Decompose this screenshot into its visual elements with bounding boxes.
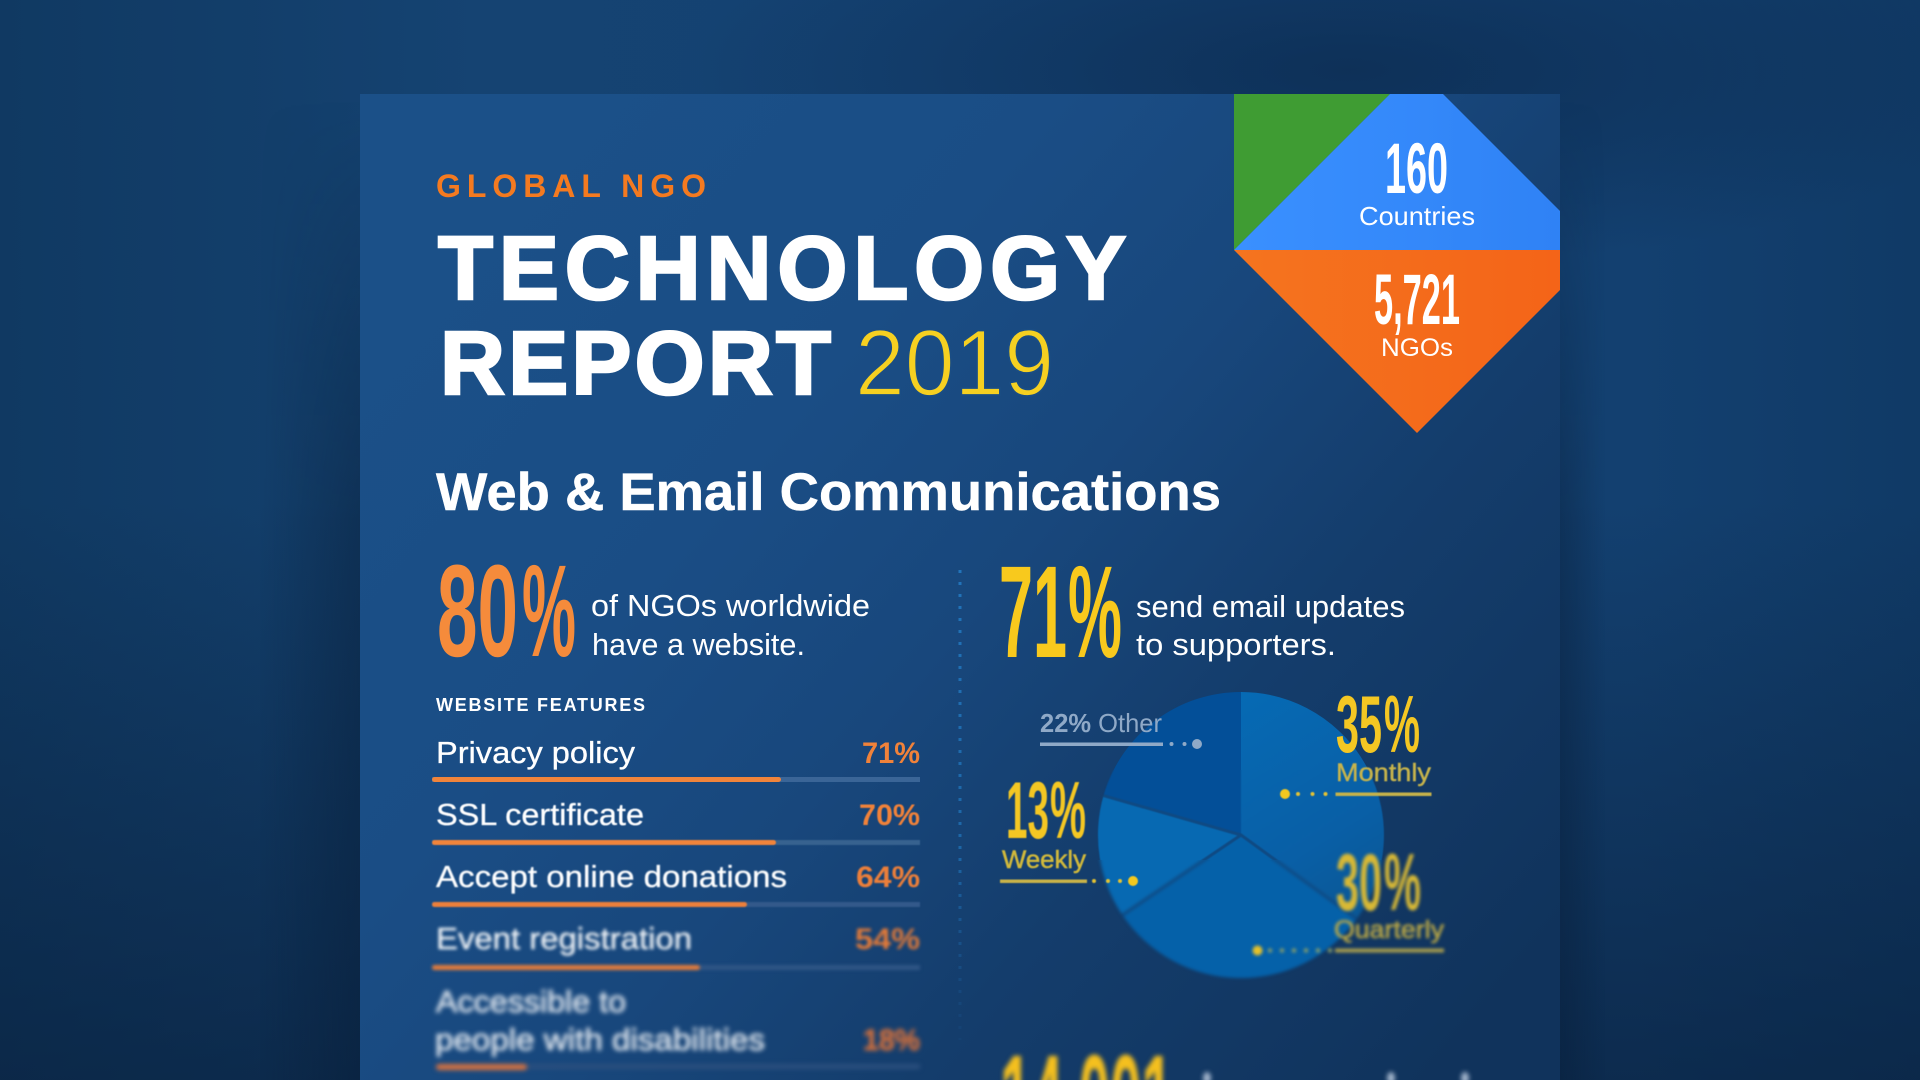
label: monthly 35%: Monthly	[1336, 759, 1432, 787]
stat: 71% email updates	[999, 538, 1405, 685]
row: accept online donations	[432, 859, 920, 907]
label: weekly 13%: Weekly	[1002, 846, 1087, 874]
stat: 5,721 NGOs	[1374, 261, 1460, 362]
row: accessible to people with disabilities	[435, 984, 920, 1070]
badge orange section	[1234, 250, 1560, 433]
title	[438, 219, 1126, 415]
stat: 80% websites	[437, 537, 870, 684]
label: quarterly 30%: 30	[1336, 838, 1382, 928]
label: monthly 35%: 35	[1336, 680, 1382, 770]
header badge: diamond	[1234, 94, 1560, 433]
row: event registration: Event registration	[436, 921, 692, 956]
stat: 71% email updates: %	[1068, 538, 1122, 685]
row: accessible to people with disabilities: people with disabilities	[435, 1022, 765, 1057]
panel: report page	[360, 94, 1560, 1080]
label: weekly 13%: 13	[1006, 766, 1049, 856]
stat: 80% websites: 80	[437, 537, 518, 684]
badge blue section	[1234, 94, 1560, 250]
label: quarterly 30%: Quarterly	[1334, 916, 1445, 944]
stat: 80% websites: %	[522, 537, 576, 684]
eyebrow: Global NGO: GLOBAL NGO	[436, 168, 706, 204]
stat: 160 countries: Countries	[1359, 201, 1475, 231]
stat: 80% websites: of NGOs worldwide	[591, 588, 870, 623]
row: privacy policy	[432, 735, 920, 782]
row: event registration	[432, 921, 920, 970]
column divider	[958, 570, 962, 1040]
label: quarterly 30%	[1252, 838, 1445, 956]
label: monthly 35%: %	[1384, 680, 1420, 770]
header badge: diamond: 5,721	[1374, 261, 1460, 340]
title: 2019	[855, 310, 1054, 415]
label: other 22%: 22% Other	[1040, 708, 1162, 738]
row: privacy policy: Privacy policy	[436, 735, 636, 770]
label: other 22%	[1040, 708, 1202, 749]
row: privacy policy: 71%	[862, 737, 920, 770]
row: event registration: 54%	[855, 923, 920, 956]
label: weekly 13%	[1000, 766, 1138, 886]
row: accessible to people with disabilities: Accessible to	[436, 984, 626, 1019]
label: weekly 13%: %	[1050, 766, 1086, 856]
row: SSL certificate: SSL certificate	[436, 797, 644, 832]
title: REPORT	[440, 314, 831, 414]
badge green triangle	[1234, 94, 1390, 250]
stat: 5,721 NGOs: NGOs	[1381, 334, 1453, 362]
stat: 71% email updates: 71	[999, 538, 1067, 685]
row: SSL certificate: 70%	[859, 799, 920, 832]
title: TECHNOLOGY	[438, 219, 1126, 319]
subheading: website features: WEBSITE FEATURES	[436, 695, 645, 715]
row: accept online donations: Accept online donations	[436, 859, 787, 894]
stat: 160 countries: 160	[1385, 130, 1448, 209]
row: SSL certificate	[432, 797, 920, 845]
row: accessible to people with disabilities: 18%	[863, 1024, 920, 1057]
feature bar chart	[432, 735, 920, 1070]
label: monthly 35%	[1280, 680, 1432, 799]
stat: 71% email updates: send email updates	[1136, 589, 1405, 624]
stat: 80% websites: have a website.	[592, 627, 805, 662]
stat: 160 countries	[1359, 130, 1475, 231]
pie chart: email frequency	[1098, 692, 1384, 978]
section heading: Web & Email Communications	[436, 463, 1221, 522]
row: accept online donations: 64%	[856, 861, 920, 894]
label: quarterly 30%: %	[1384, 838, 1421, 928]
stat: 71% email updates: to supporters.	[1136, 627, 1336, 662]
